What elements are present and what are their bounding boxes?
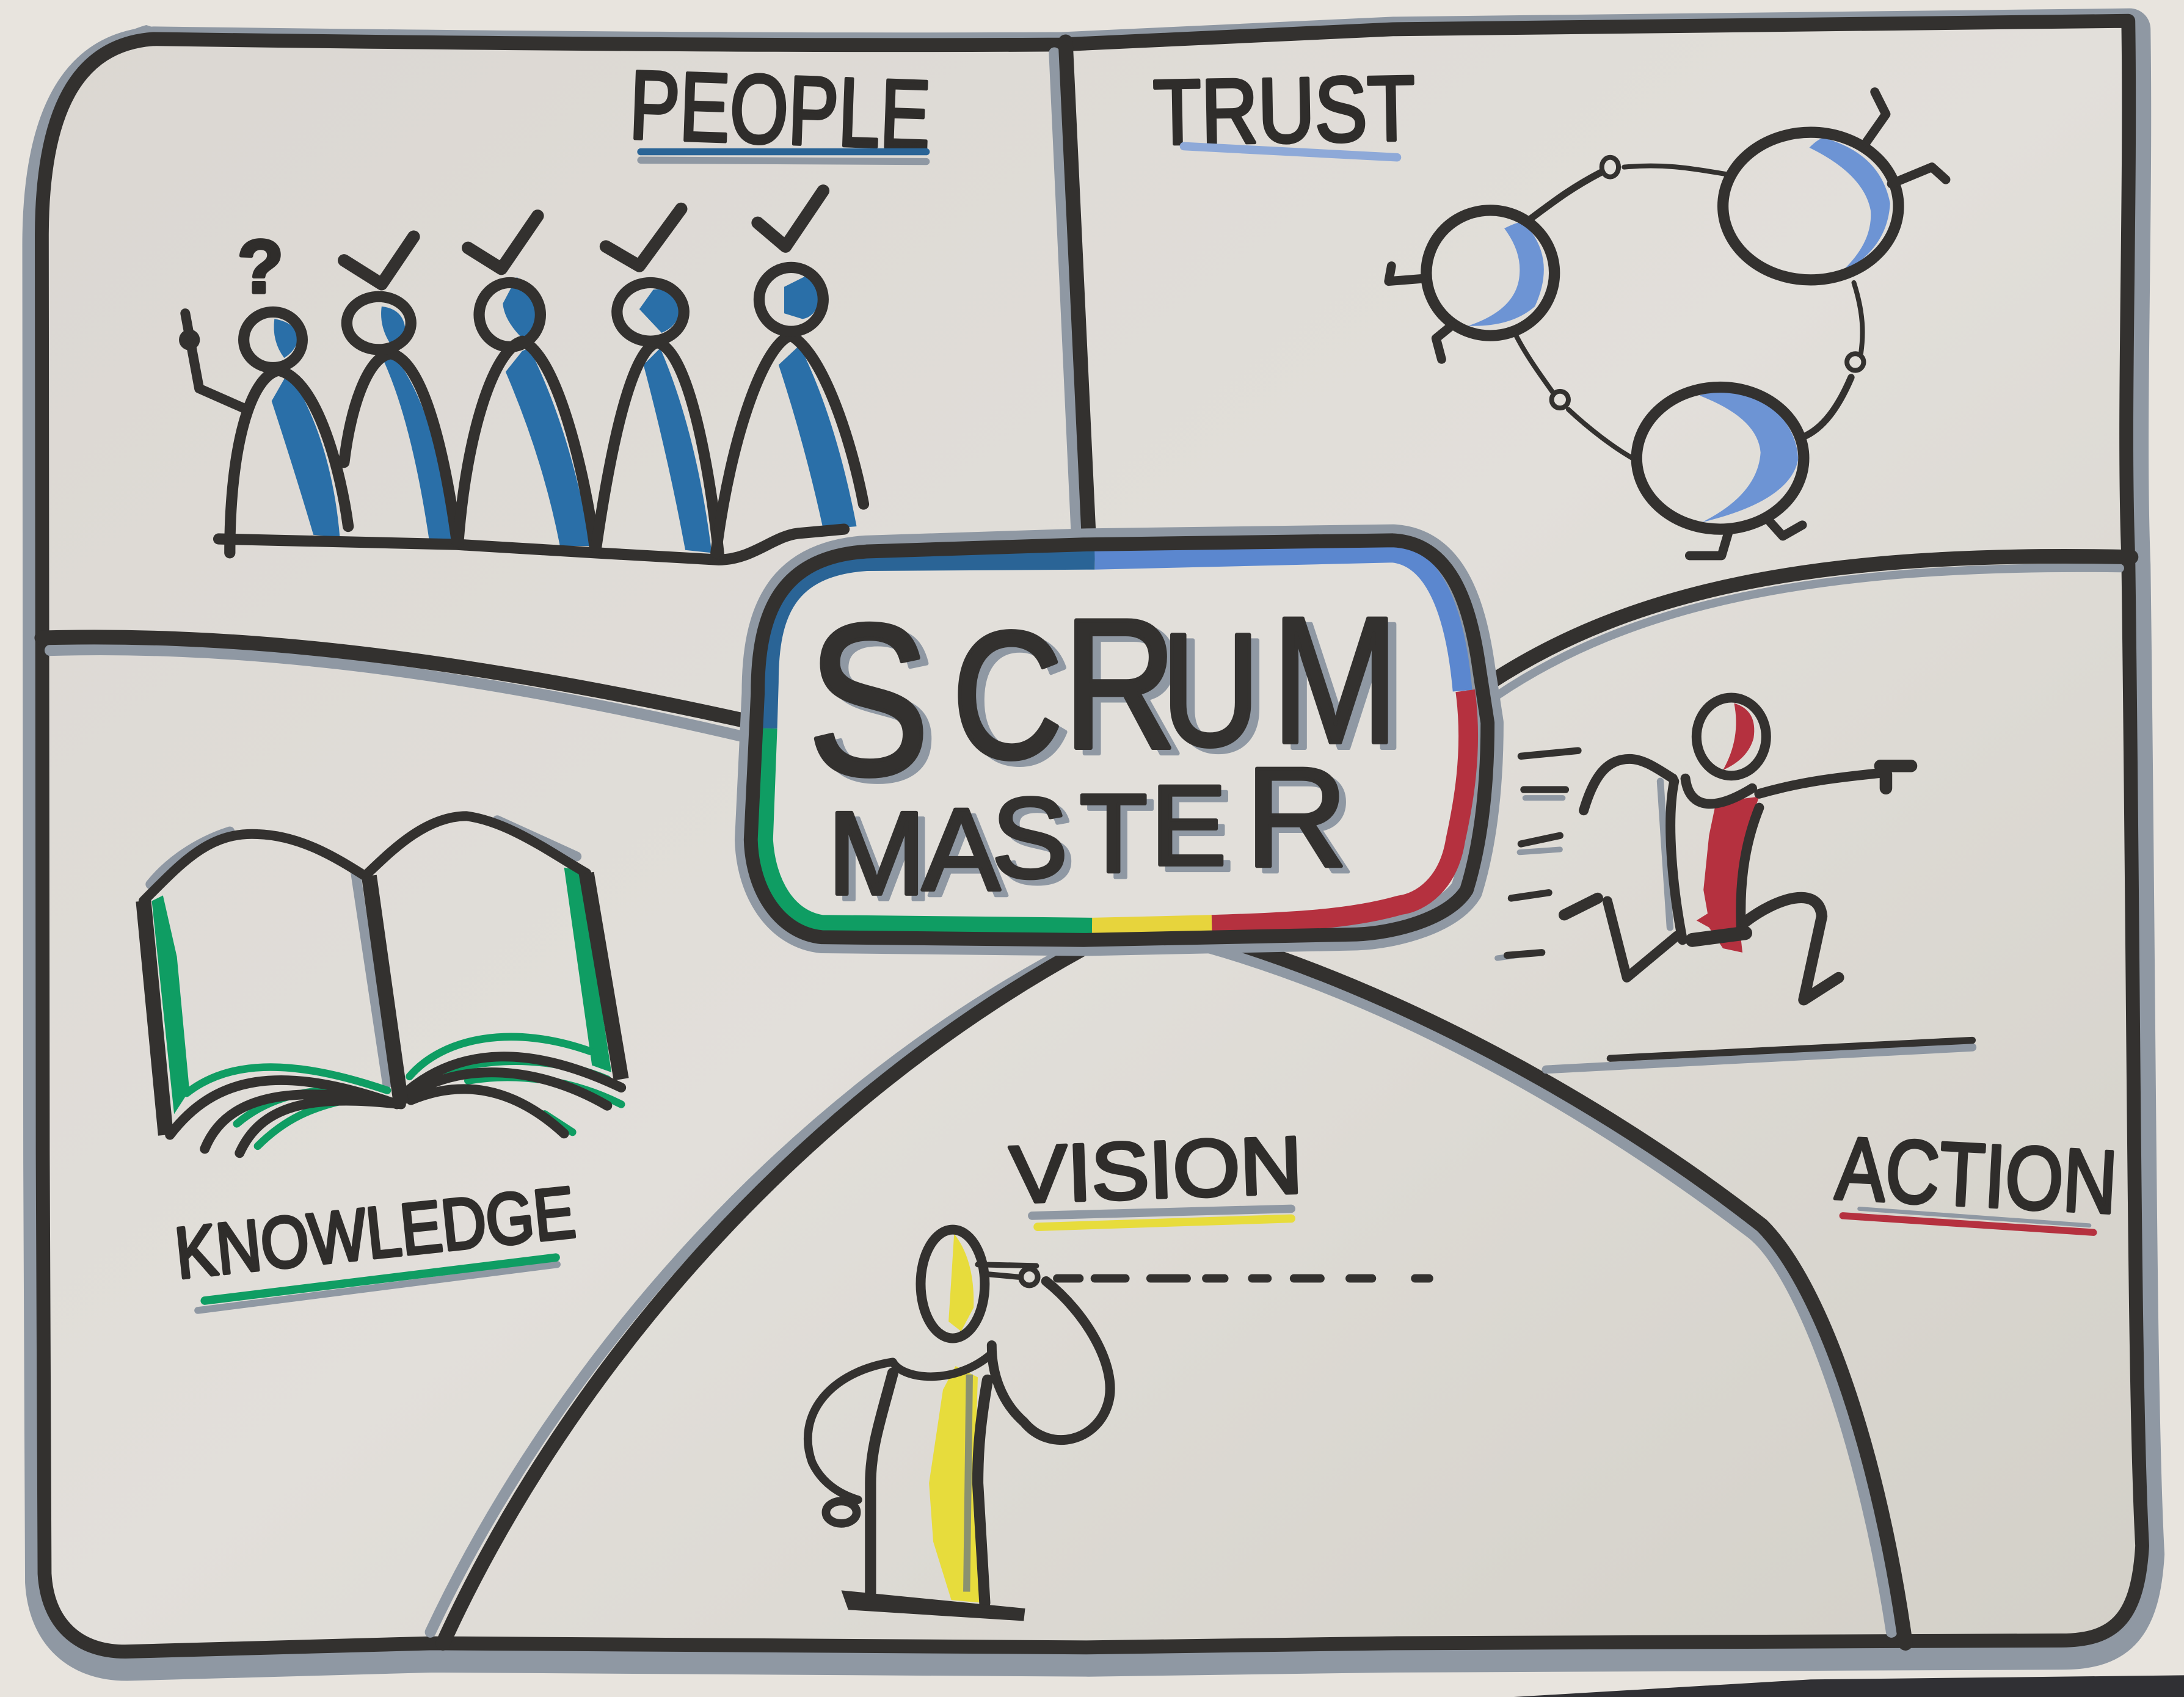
title: scrum: U bbox=[1170, 606, 1268, 785]
running figure bbox=[1564, 698, 1911, 1000]
ground line bbox=[1546, 1041, 1972, 1069]
title: master: S bbox=[992, 774, 1068, 902]
title: scrum: C bbox=[960, 600, 1071, 802]
title: master: S bbox=[999, 780, 1075, 907]
title: master: M bbox=[828, 788, 926, 920]
question mark: ? bbox=[238, 225, 283, 309]
three linked people bbox=[1389, 92, 1946, 556]
title: master bbox=[828, 738, 1355, 925]
title: master: M bbox=[834, 793, 933, 925]
title: master: E bbox=[1151, 761, 1227, 889]
title: master: A bbox=[922, 784, 1000, 915]
title: scrum: S bbox=[816, 584, 938, 826]
heading: vision: VISION bbox=[1008, 1120, 1304, 1221]
title: scrum: R bbox=[1071, 586, 1185, 793]
figure looking ahead bbox=[808, 1230, 1429, 1621]
title: scrum bbox=[807, 579, 1407, 826]
title: master: R bbox=[1245, 738, 1348, 896]
panel: trust bbox=[1152, 57, 1946, 556]
heading: trust: TRUST bbox=[1152, 57, 1416, 164]
title: scrum: U bbox=[1162, 600, 1260, 779]
title: master: A bbox=[929, 790, 1007, 920]
title: scrum: C bbox=[952, 594, 1063, 796]
heading: people: PEOPLE bbox=[628, 49, 933, 169]
group of team members bbox=[183, 191, 864, 560]
panel: vision bbox=[808, 1120, 1429, 1621]
heading: knowledge: KNOWLEDGE bbox=[172, 1172, 579, 1294]
speed lines bbox=[1498, 750, 1578, 958]
title: scrum: M bbox=[1272, 580, 1399, 780]
title: scrum: R bbox=[1063, 580, 1177, 787]
blue figure shading bbox=[272, 276, 857, 553]
title: master: T bbox=[1079, 771, 1148, 896]
panel: people bbox=[183, 49, 933, 560]
title: master: E bbox=[1157, 767, 1234, 895]
title: master: T bbox=[1087, 777, 1154, 901]
title: master: R bbox=[1252, 744, 1355, 903]
panel: knowledge bbox=[144, 816, 621, 1310]
heading: action: ACTION bbox=[1833, 1118, 2120, 1232]
panel: central scrum master box bbox=[751, 540, 1488, 940]
panel: action bbox=[1498, 698, 2120, 1232]
open book bbox=[144, 816, 621, 1153]
title: scrum: M bbox=[1280, 585, 1407, 786]
title: scrum: S bbox=[807, 579, 930, 820]
coloured border band bbox=[763, 553, 1468, 928]
blue circle shading bbox=[1468, 138, 1890, 522]
